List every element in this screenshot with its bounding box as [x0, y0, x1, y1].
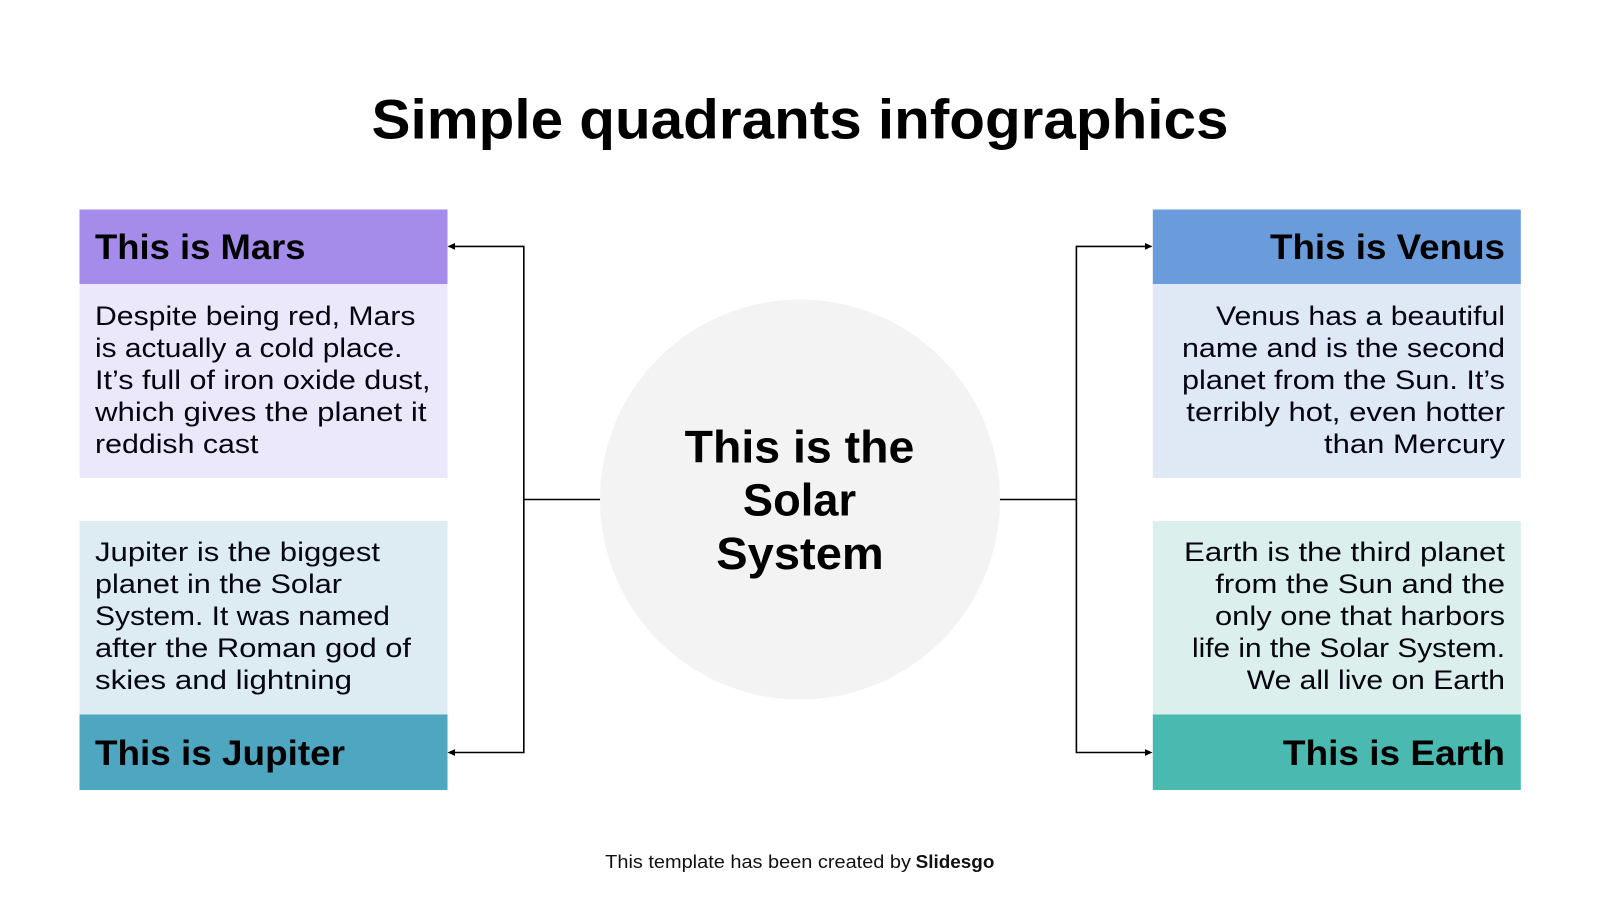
- panel: Venus: Venus has a beautiful: [1216, 301, 1505, 331]
- panel: Mars: [80, 210, 448, 478]
- panel: Venus: terribly hot, even hotter: [1186, 397, 1505, 427]
- panel: Earth: only one that harbors: [1215, 601, 1505, 631]
- panel: Earth: Earth is the third planet: [1184, 537, 1506, 567]
- panel: Venus: [1153, 210, 1521, 478]
- central circle: System: [716, 528, 884, 579]
- panel: Mars: is actually a cold place.: [95, 333, 402, 363]
- panel: Mars: which gives the planet it: [94, 397, 427, 427]
- central circle: Solar: [743, 474, 856, 526]
- central circle: [600, 300, 1000, 700]
- panel: Earth: This is Earth: [1283, 734, 1505, 773]
- connector: right arrows: [1000, 243, 1152, 756]
- panel: Venus: name and is the second: [1182, 333, 1505, 363]
- panel: Mars: reddish cast: [95, 429, 259, 459]
- panel: Jupiter: [80, 521, 448, 790]
- panel: Jupiter: skies and lightning: [95, 665, 352, 695]
- connector: left arrows: [448, 243, 600, 756]
- panel: Venus: than Mercury: [1324, 429, 1506, 459]
- panel: Jupiter: This is Jupiter: [95, 734, 345, 773]
- panel: Mars: This is Mars: [95, 228, 306, 267]
- panel: Jupiter: planet in the Solar: [95, 569, 342, 599]
- panel: Jupiter: after the Roman god of: [95, 633, 412, 663]
- panel: Venus: This is Venus: [1270, 228, 1505, 267]
- panel: Earth: from the Sun and the: [1215, 569, 1505, 599]
- panel: Earth: We all live on Earth: [1247, 665, 1505, 695]
- panel: Jupiter: Jupiter is the biggest: [95, 537, 381, 567]
- panel: Mars: It’s full of iron oxide dust,: [95, 365, 430, 395]
- central circle: This is the: [685, 422, 914, 472]
- title: Simple quadrants infographics: [372, 88, 1228, 150]
- panel: Venus: planet from the Sun. It’s: [1182, 365, 1505, 395]
- footer credit: Slidesgo: [916, 852, 994, 872]
- panel: Jupiter: System. It was named: [95, 601, 390, 631]
- panel: Earth: life in the Solar System.: [1192, 633, 1505, 663]
- panel: Mars: Despite being red, Mars: [95, 301, 415, 331]
- panel: Earth: [1153, 521, 1521, 790]
- footer credit: This template has been created by: [605, 852, 911, 872]
